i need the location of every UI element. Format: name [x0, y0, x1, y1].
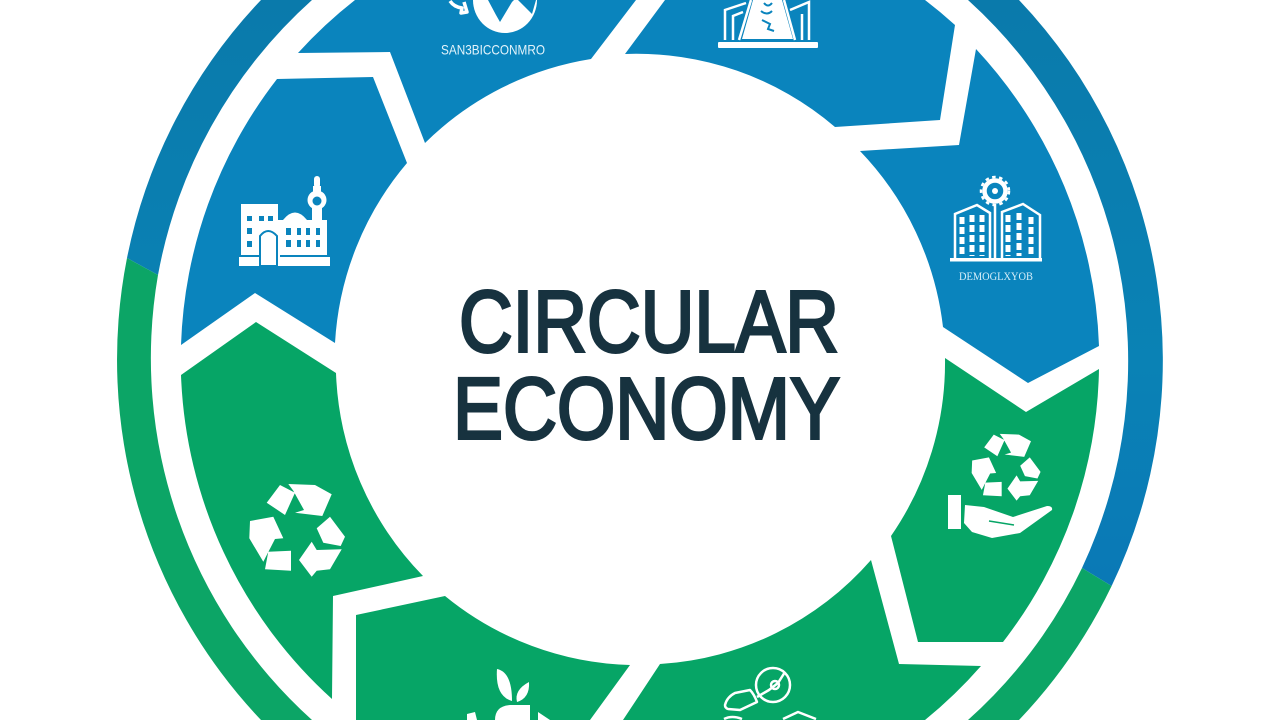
panel: recycling segment — [181, 322, 423, 699]
icon: globe — [450, 0, 537, 33]
icon: bottles and disc — [724, 668, 816, 719]
title — [453, 274, 840, 458]
icon: recycling symbol — [249, 484, 345, 577]
label: gear factory segment caption: DEMOGLXYOB — [959, 269, 1033, 283]
panel: bottles segment — [623, 560, 981, 720]
title: ECONOMY — [453, 360, 840, 458]
panel: apple segment — [356, 596, 630, 720]
panel: gear factory segment — [860, 49, 1099, 383]
icon: tower with side frames — [718, 0, 818, 48]
icon: apple with leaves — [467, 669, 550, 720]
panel: recycling hand segment — [891, 358, 1099, 642]
panel: globe segment — [298, 0, 636, 143]
panel: tower segment — [625, 0, 955, 127]
icon: buildings with gear — [950, 177, 1042, 262]
panel: building segment — [181, 77, 407, 345]
label: globe segment caption: SAN3BICCONMRO — [441, 42, 545, 58]
title: CIRCULAR — [459, 274, 839, 370]
icon: city hall building — [239, 176, 330, 266]
icon: recycling symbol above a hand — [948, 434, 1052, 538]
